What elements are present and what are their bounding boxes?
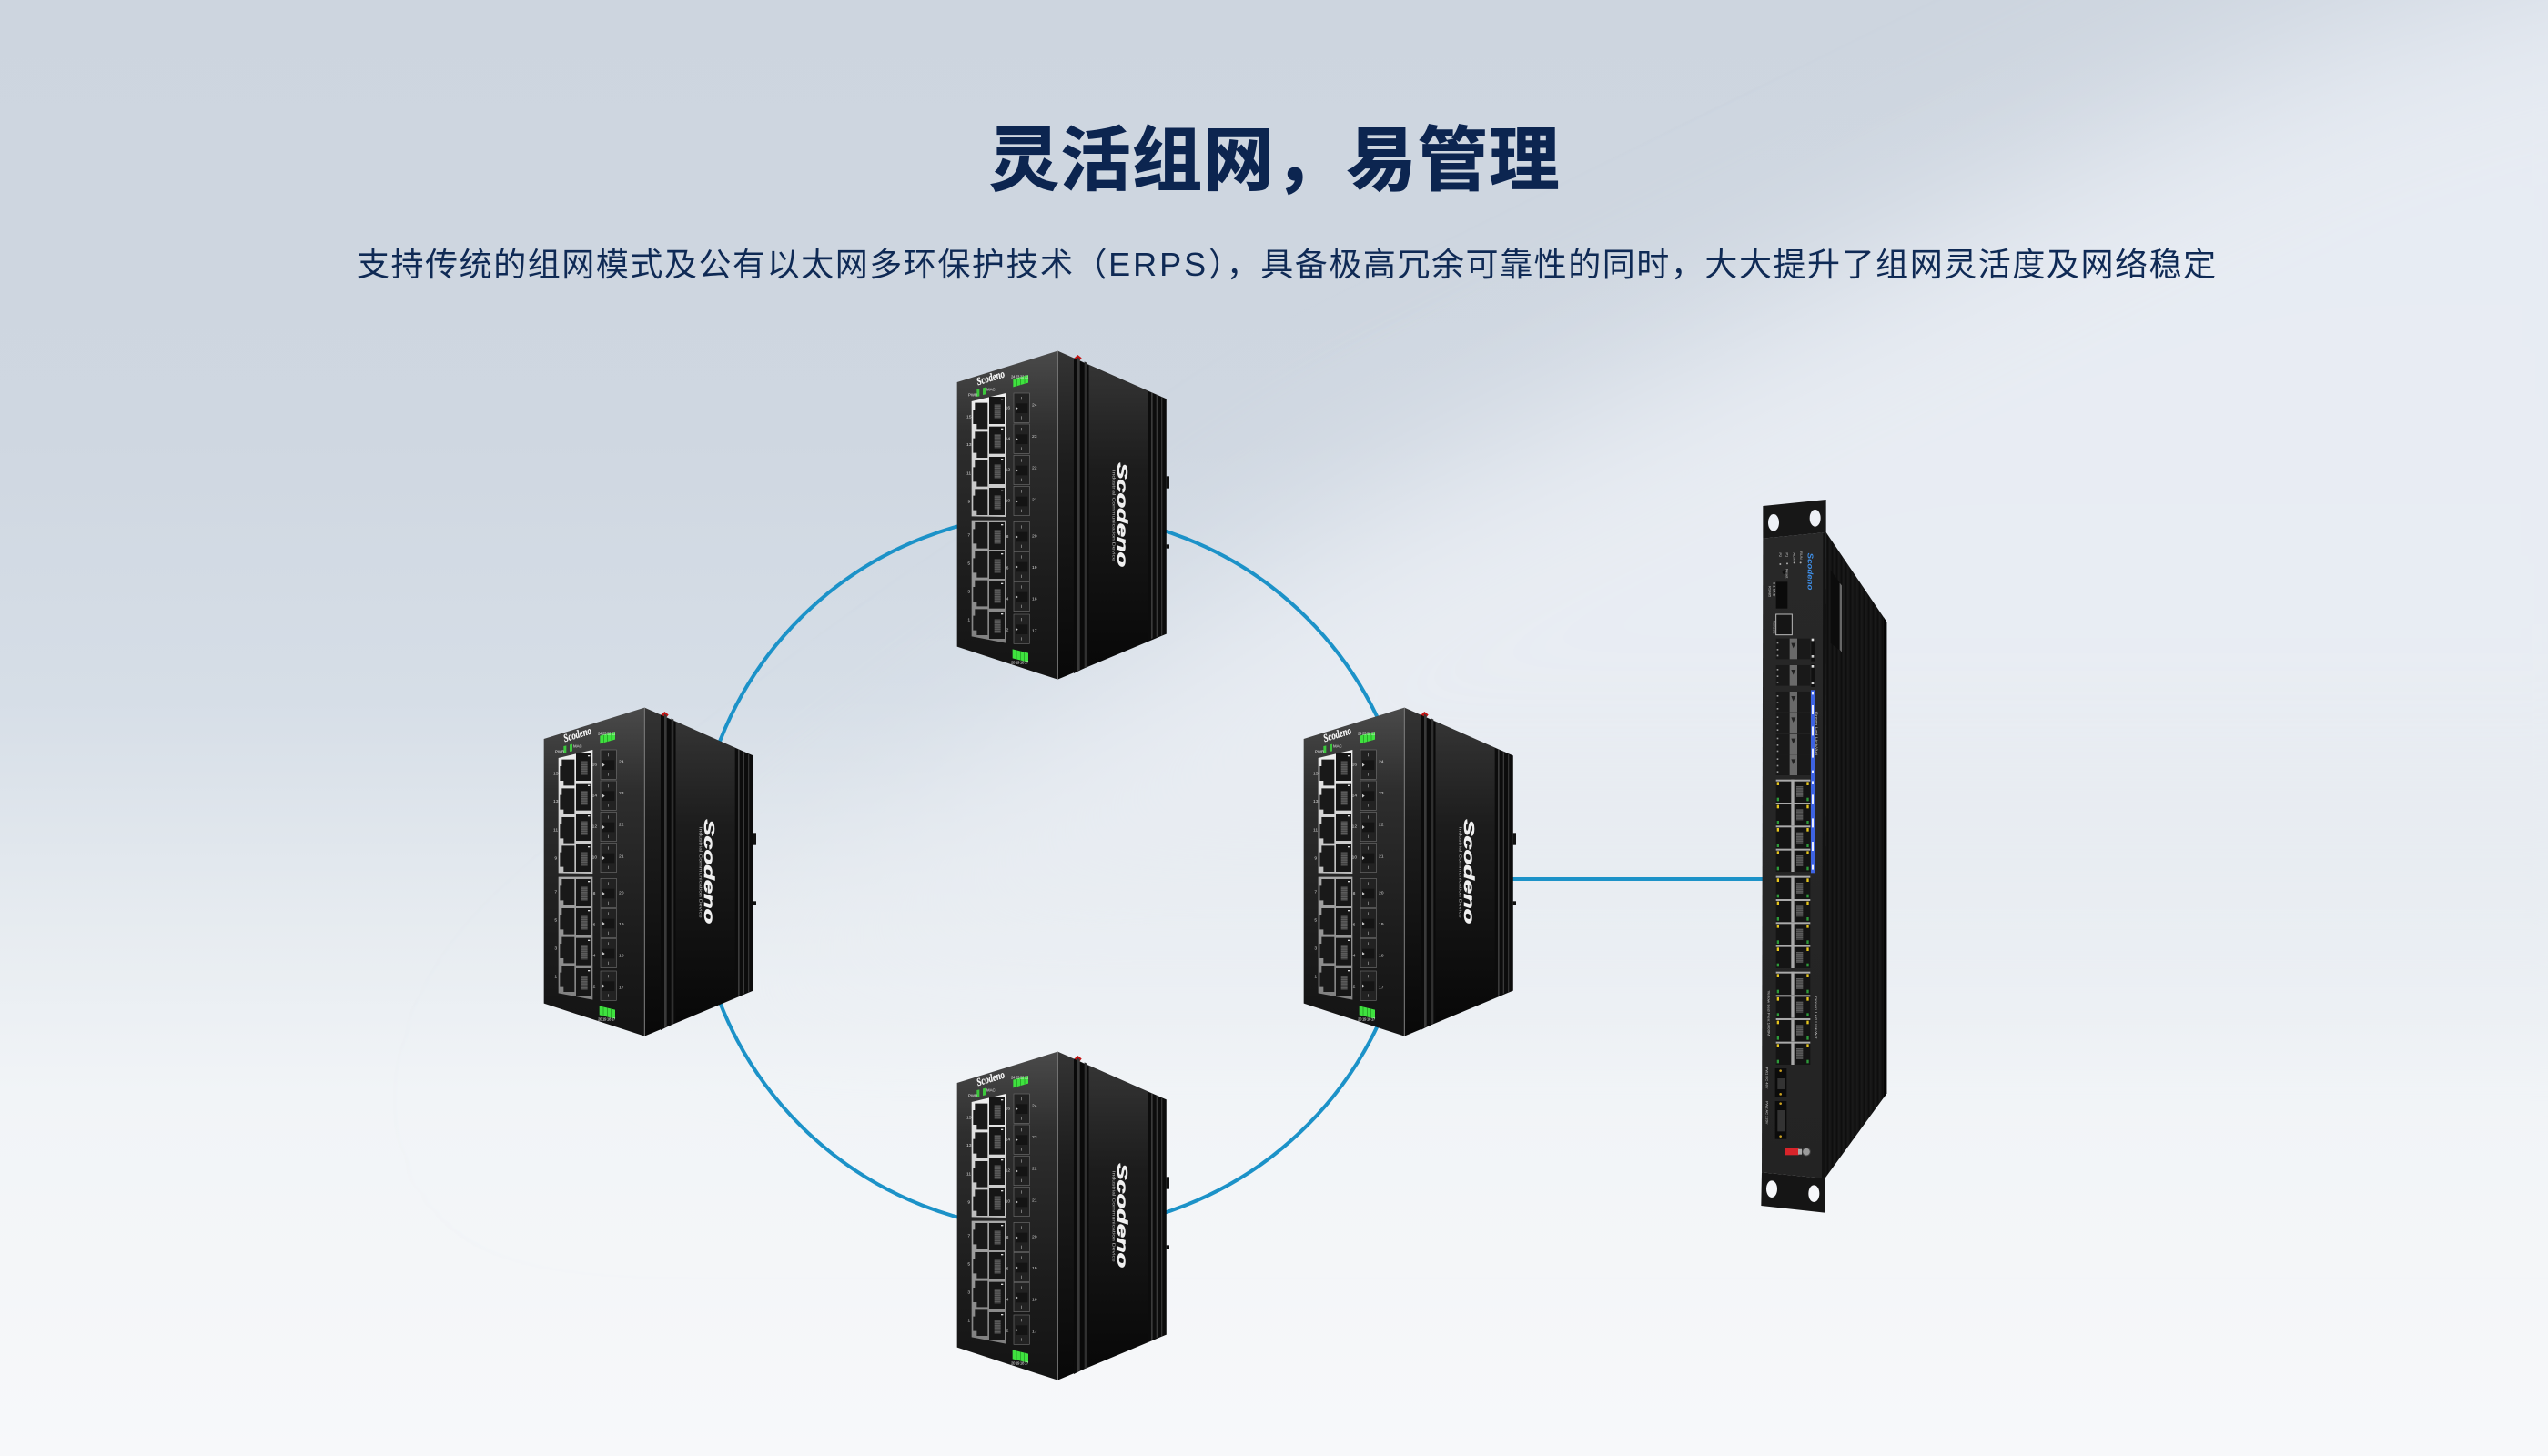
switch labels (1313, 724, 1476, 1021)
rack status labels and indicators (1767, 551, 1804, 609)
switch labels: 7 (1314, 889, 1317, 895)
switch labels: 19 (1032, 565, 1037, 571)
switch labels: 24 23 22 21 (1011, 1075, 1029, 1079)
SFP ports (1776, 639, 1810, 775)
rack logo: Scodeno (1806, 553, 1815, 591)
switch labels: 11 (553, 828, 558, 834)
switch labels: 20 19 18 17 (1011, 1360, 1029, 1365)
switch labels: 6 (1006, 1267, 1009, 1272)
switch labels: 24 (1032, 403, 1037, 409)
switch labels: 1 (1314, 975, 1317, 980)
switch body (957, 351, 1169, 680)
switch labels: 20 (619, 891, 624, 896)
rack status labels and indicators: P1 (1785, 552, 1790, 558)
switch labels: Scodeno (975, 1068, 1006, 1088)
switch labels: 4 (1006, 597, 1009, 602)
switch labels: 1 (967, 618, 970, 623)
uplink line (1511, 877, 1765, 881)
switch labels: 2 (1353, 984, 1356, 989)
switch labels: 5 (554, 918, 557, 924)
switch labels: 1 (554, 975, 557, 980)
switch labels: 23 (1032, 1135, 1037, 1140)
rack top ear (1763, 500, 1826, 539)
switch labels: Industrial Communication Device (1459, 827, 1463, 919)
switch labels: 4 (1353, 954, 1356, 959)
switch labels: MAC (986, 387, 996, 391)
rack legends: Green Led Link/Act (1815, 996, 1819, 1040)
switch labels: 24 23 22 21 (1011, 374, 1029, 379)
blue indicator strip (1811, 639, 1815, 873)
subtitle text: 支持传统的组网模式及公有以太网多环保护技术（ERPS），具备极高冗余可靠性的同时，大大提升了组网灵活度及网络稳定 (357, 246, 2218, 283)
rack front panel (1762, 532, 1826, 1178)
switch labels: 13 (1313, 799, 1319, 804)
switch labels: 22 (1379, 823, 1384, 828)
switch labels: 19 (1032, 1266, 1037, 1271)
switch labels: 8 (1006, 1235, 1009, 1240)
switch labels: 17 (1032, 1329, 1037, 1334)
switch labels (553, 724, 716, 1021)
rack side fins (1825, 532, 1886, 1178)
switch labels: 16 (592, 762, 597, 767)
rack bottom ear (1761, 1172, 1825, 1213)
switch labels: 4 (1006, 1298, 1009, 1303)
switch labels: MAC (1333, 743, 1342, 748)
rack status labels and indicators: ALM (1793, 552, 1797, 561)
rack legends (1767, 712, 1819, 1040)
switch labels: Industrial Communication Device (1112, 1171, 1117, 1263)
switch body (1304, 708, 1516, 1036)
rack status labels and indicators: RUN (1799, 551, 1804, 560)
switch labels: 6 (593, 923, 596, 928)
switch labels: PWR (968, 392, 977, 397)
switch labels: Scodeno (1321, 724, 1353, 744)
switch labels: Scodeno (1114, 1163, 1129, 1268)
switch labels: 18 (1032, 1298, 1037, 1303)
switch labels: PWR (1315, 749, 1324, 753)
switch labels: 15 (1313, 771, 1319, 776)
switch labels: 24 (1032, 1104, 1037, 1109)
switch labels: 21 (1379, 854, 1384, 859)
switch labels (966, 1068, 1129, 1365)
switch labels: 12 (1006, 1168, 1010, 1173)
switch labels: 22 (1032, 466, 1037, 471)
switch labels: 20 (1379, 891, 1384, 896)
power terminals (1765, 1067, 1786, 1139)
switch labels: 10 (1006, 1199, 1010, 1205)
switch labels: 12 (1352, 824, 1357, 829)
switch labels: 6 (1353, 923, 1356, 928)
switch labels: 23 (619, 791, 624, 796)
rack status labels and indicators: Reset (1785, 569, 1790, 579)
switch labels: 1 (967, 1319, 970, 1324)
switch labels: 13 (966, 442, 972, 448)
switch labels: 7 (967, 1233, 970, 1239)
switch labels: 16 (1006, 1106, 1010, 1111)
switch labels: 18 (619, 954, 624, 959)
switch labels: 6 (1006, 566, 1009, 571)
switch labels: 21 (1032, 497, 1037, 502)
switch labels: 9 (1314, 855, 1317, 861)
switch labels: 16 (1352, 762, 1357, 767)
switch labels: 9 (967, 499, 970, 504)
switch labels: PWR (555, 749, 564, 753)
switch labels: 8 (1006, 534, 1009, 540)
switch labels: 20 19 18 17 (598, 1016, 616, 1021)
switch labels: Scodeno (1114, 462, 1129, 567)
rack status labels and indicators: P2 (1778, 552, 1783, 558)
switch labels: 23 (1032, 434, 1037, 440)
ring link (695, 513, 1412, 1230)
switch: right (1304, 708, 1516, 1036)
switch labels: 22 (619, 823, 624, 828)
power terminals: PW1 DC 48V (1765, 1067, 1770, 1089)
switch labels: 15 (966, 414, 972, 420)
switch labels: 7 (554, 889, 557, 895)
switch labels: 21 (619, 854, 624, 859)
switch labels: PWR (968, 1093, 977, 1097)
switch labels: 24 (1379, 760, 1384, 765)
switch labels: 2 (1006, 1328, 1009, 1333)
rack status labels and indicators: RS485 (1767, 586, 1772, 598)
switch labels: 14 (1352, 793, 1357, 798)
switch labels: 13 (553, 799, 559, 804)
power terminals: PW2 AC 220V (1765, 1101, 1770, 1125)
switch labels: 3 (967, 1290, 970, 1296)
switch labels: 4 (593, 954, 596, 959)
switch body (544, 708, 756, 1036)
switch labels: 17 (619, 985, 624, 990)
switch labels: Scodeno (975, 368, 1006, 388)
switch labels: 21 (1032, 1198, 1037, 1203)
switch body (957, 1052, 1169, 1380)
switch labels: MAC (986, 1087, 996, 1092)
switch labels: 17 (1379, 985, 1384, 990)
switch labels: 22 (1032, 1167, 1037, 1172)
rack status labels and indicators: 0 1 GND (1773, 582, 1777, 597)
switch labels: 12 (592, 824, 597, 829)
switch labels: 20 (1032, 534, 1037, 540)
switch labels: 9 (967, 1199, 970, 1205)
switch labels: 18 (1379, 954, 1384, 959)
switch labels: 9 (554, 855, 557, 861)
switch labels: MAC (573, 743, 582, 748)
switch labels: 3 (1314, 946, 1317, 952)
switch labels: 24 23 22 21 (1358, 731, 1376, 735)
title: 灵活组网，易管理 (989, 122, 1561, 200)
switch labels: 14 (1006, 436, 1010, 441)
switch labels: 11 (966, 471, 971, 477)
switch labels: 7 (967, 532, 970, 538)
switch labels: Scodeno (561, 724, 593, 744)
switch labels: 24 23 22 21 (598, 731, 616, 735)
switch labels: 20 19 18 17 (1011, 660, 1029, 664)
switch labels: 16 (1006, 405, 1010, 410)
switch: left (544, 708, 756, 1036)
switch: bottom (957, 1052, 1169, 1380)
switch labels: Scodeno (1461, 819, 1476, 924)
console port: Console (1773, 621, 1777, 634)
switch labels: 15 (966, 1115, 972, 1120)
switch labels (966, 368, 1129, 664)
switch labels: 12 (1006, 467, 1010, 472)
switch labels: 24 (619, 760, 624, 765)
switch labels: 3 (967, 590, 970, 595)
switch labels: 5 (967, 1262, 970, 1268)
switch: top (957, 351, 1169, 680)
switch labels: 13 (966, 1143, 972, 1148)
switch labels: 2 (1006, 627, 1009, 632)
switch labels: 8 (593, 891, 596, 896)
switch labels: 19 (619, 922, 624, 927)
rack legends: Green Led Link/Act (1815, 712, 1819, 756)
switch labels: 20 19 18 17 (1358, 1016, 1376, 1021)
grounding screw (1785, 1148, 1810, 1156)
switch labels: 11 (1313, 828, 1318, 834)
switch labels: 14 (592, 793, 597, 798)
switch labels: 15 (553, 771, 559, 776)
switch labels: 3 (554, 946, 557, 952)
switch labels: 18 (1032, 597, 1037, 602)
switch labels: 5 (1314, 918, 1317, 924)
switch labels: 2 (593, 984, 596, 989)
switch labels: Scodeno (701, 819, 716, 924)
switch labels: 14 (1006, 1137, 1010, 1142)
rack legends: Yellow Led Flex:1000M (1767, 990, 1772, 1036)
switch labels: Industrial Communication Device (699, 827, 703, 919)
switch labels: Industrial Communication Device (1112, 470, 1117, 562)
switch labels: 5 (967, 561, 970, 567)
switch labels: 23 (1379, 791, 1384, 796)
switch labels: 10 (1006, 499, 1010, 504)
switch labels: 17 (1032, 628, 1037, 633)
switch labels: 20 (1032, 1235, 1037, 1240)
rack right edge (1822, 532, 1826, 1178)
switch labels: 10 (1352, 855, 1357, 861)
switch labels: 11 (966, 1172, 971, 1178)
switch labels: 8 (1353, 891, 1356, 896)
switch labels: 19 (1379, 922, 1384, 927)
console port (1773, 614, 1792, 635)
rack switch (1761, 500, 1886, 1213)
switch labels: 10 (592, 855, 597, 861)
RJ45 ports (1776, 780, 1810, 1065)
